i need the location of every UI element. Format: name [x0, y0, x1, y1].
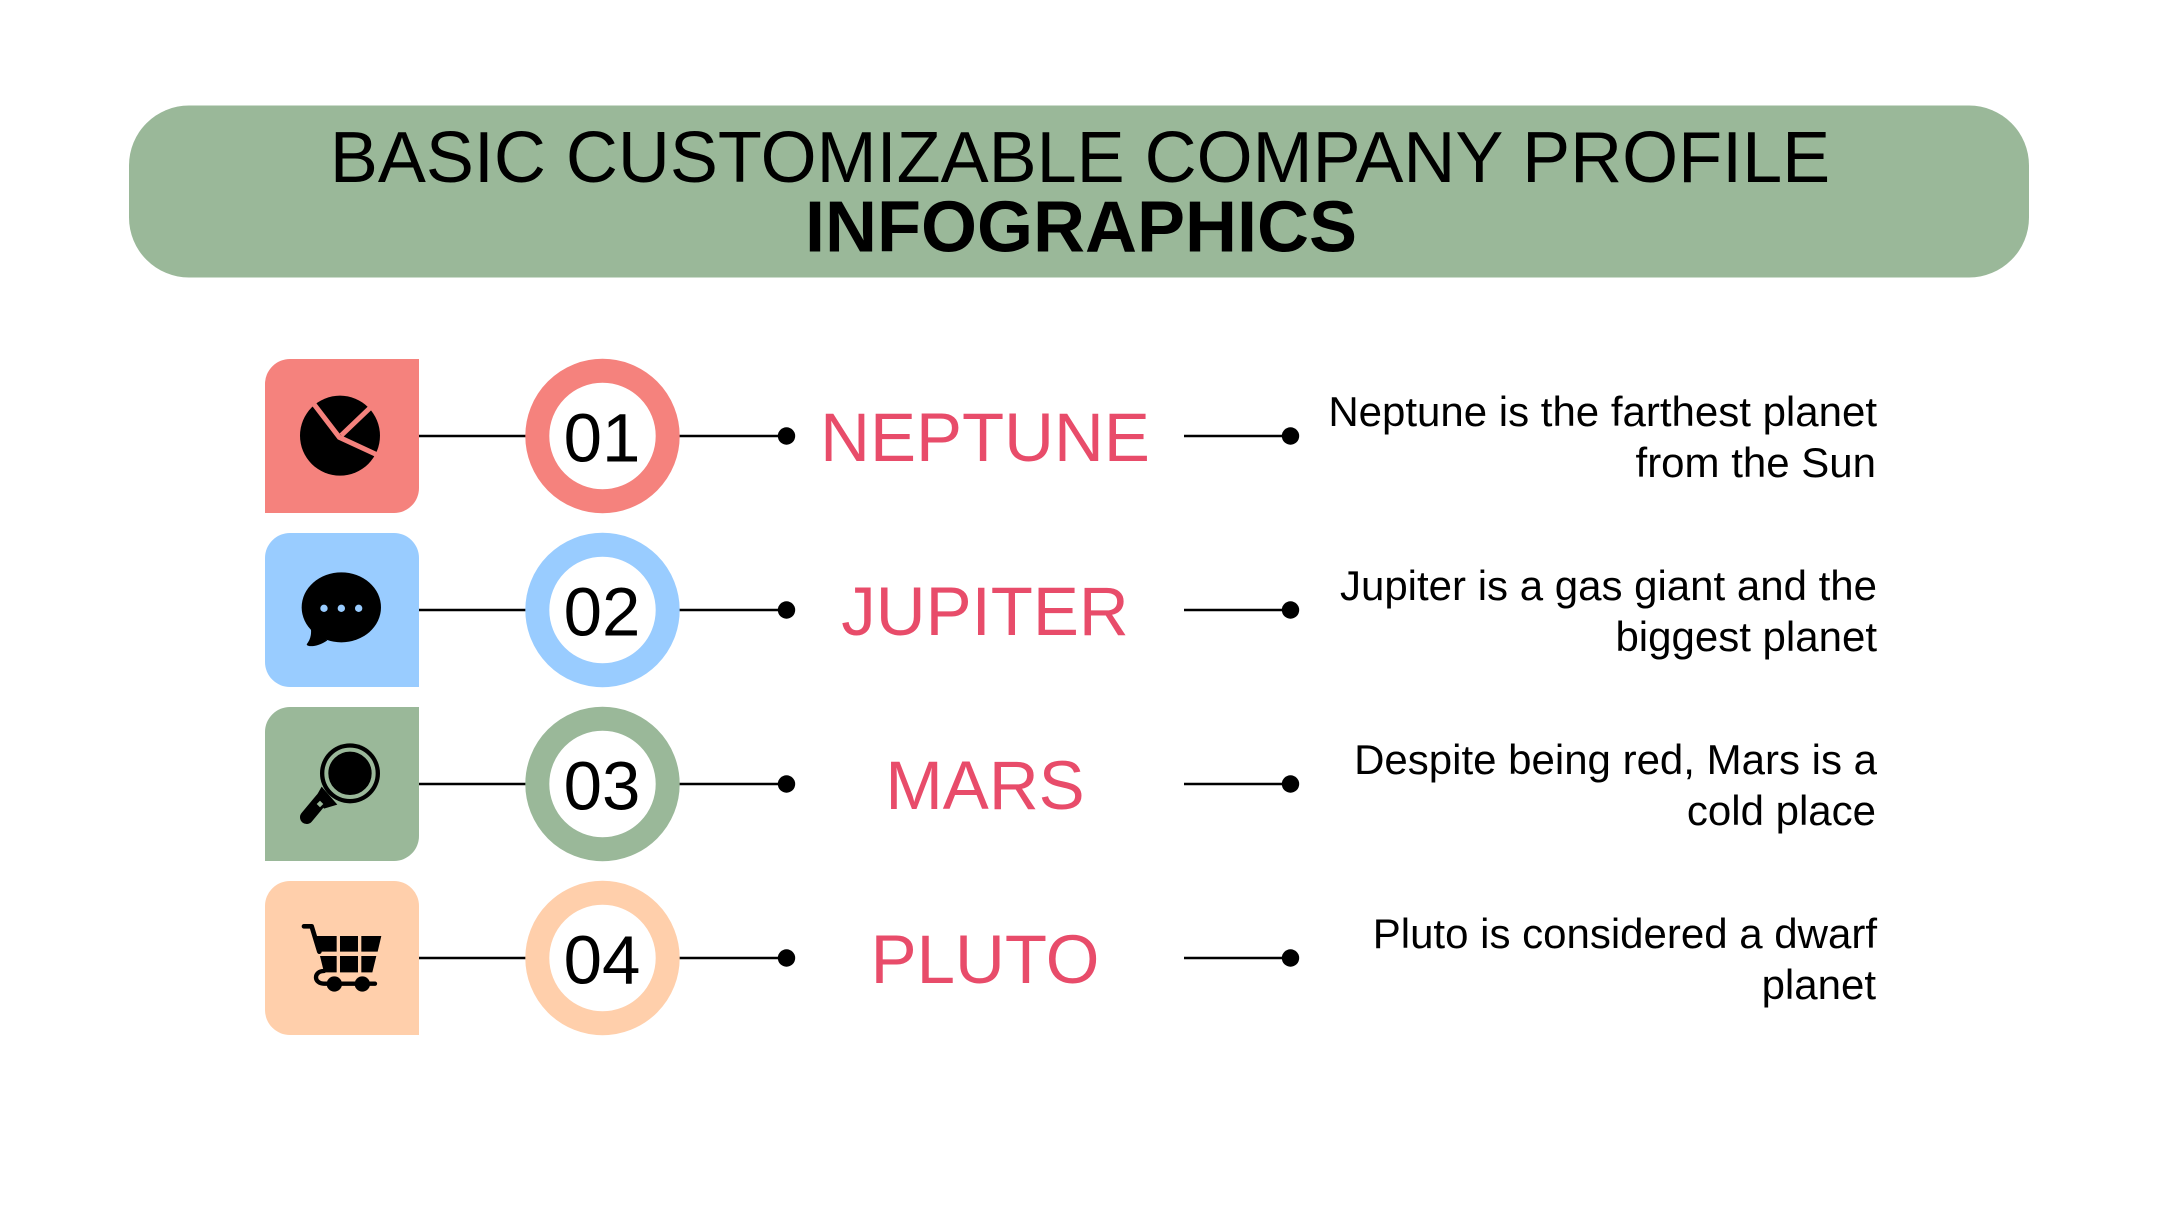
icon: speech bubble — [302, 572, 381, 646]
title line 1: BASIC CUSTOMIZABLE COMPANY PROFILE — [330, 118, 1830, 198]
icon: magnifying glass — [307, 743, 380, 817]
number: 03 — [564, 748, 640, 824]
connector dots — [778, 427, 1299, 445]
description: Pluto is considered a dwarf — [1373, 910, 1877, 957]
number: 04 — [564, 922, 640, 998]
title banner — [129, 106, 2029, 278]
row 4: Pluto — [265, 881, 1877, 1035]
connector lines — [419, 435, 1290, 437]
number ring — [537, 545, 668, 675]
description: Neptune is the farthest planet — [1328, 388, 1877, 435]
number: 02 — [564, 574, 640, 650]
description: Despite being red, Mars is a — [1354, 736, 1878, 783]
title line 2: INFOGRAPHICS — [805, 188, 1357, 268]
name: PLUTO — [871, 921, 1099, 998]
row 3: Mars — [265, 707, 1878, 861]
description: biggest planet — [1615, 613, 1877, 660]
icon tile — [265, 707, 419, 861]
icon tile — [265, 533, 419, 687]
name: MARS — [885, 747, 1085, 824]
icon: shopping cart — [304, 926, 381, 992]
icon tile — [265, 881, 419, 1035]
name: NEPTUNE — [820, 399, 1150, 476]
connector lines — [419, 783, 1290, 785]
description: Jupiter is a gas giant and the — [1340, 562, 1877, 609]
connector lines — [419, 609, 1290, 611]
icon: pie chart — [300, 396, 380, 476]
description: cold place — [1687, 787, 1876, 834]
description: planet — [1762, 961, 1876, 1008]
icon tile — [265, 359, 419, 513]
description: from the Sun — [1636, 439, 1876, 486]
connector lines — [419, 957, 1290, 959]
number ring — [537, 719, 668, 849]
row 1: Neptune — [265, 359, 1877, 513]
number ring — [537, 371, 668, 501]
number: 01 — [564, 400, 640, 476]
name: JUPITER — [841, 573, 1129, 650]
row 2: Jupiter — [265, 533, 1877, 687]
number ring — [537, 893, 668, 1023]
connector dots — [778, 601, 1299, 619]
connector dots — [778, 775, 1299, 793]
connector dots — [778, 949, 1299, 967]
